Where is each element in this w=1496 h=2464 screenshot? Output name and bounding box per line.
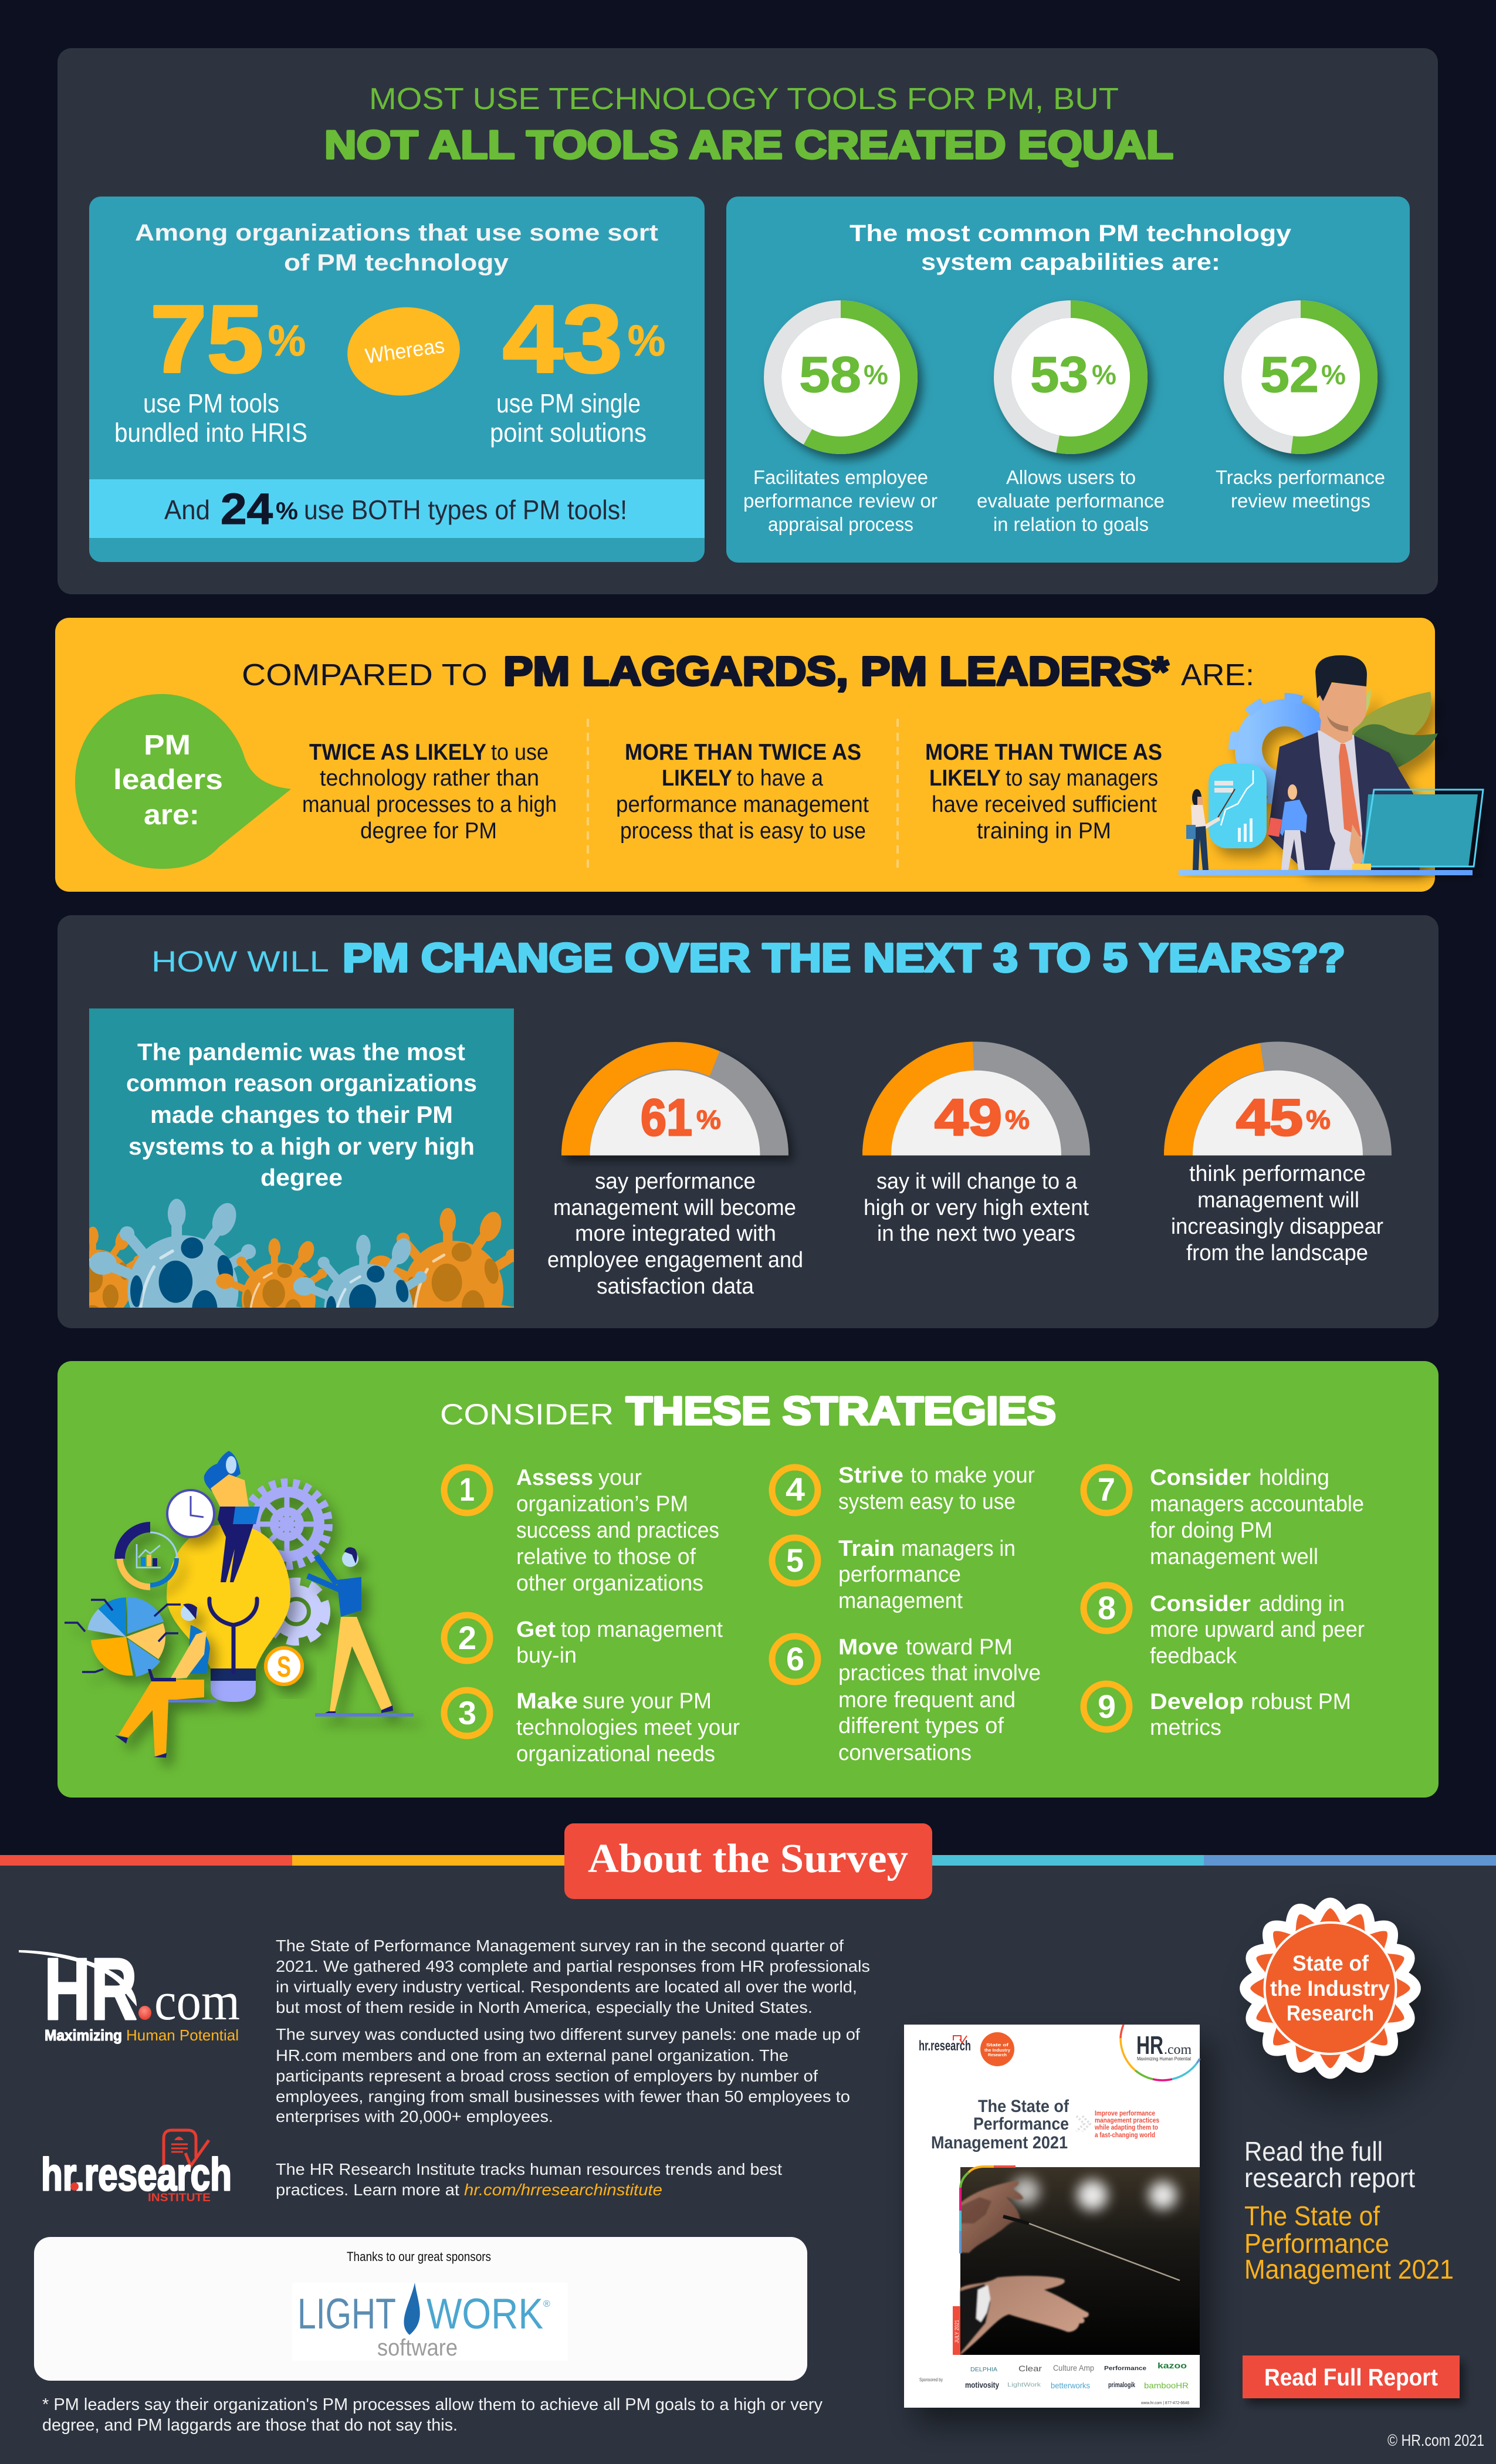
cover sponsors: kazoo — [1157, 2361, 1187, 2370]
cover subtitle: Improve performance — [1095, 2109, 1155, 2117]
cover title: Management 2021 — [931, 2133, 1068, 2152]
finding 3: MORE THAN TWICE AS — [925, 740, 1162, 765]
cover logos: .com — [1164, 2042, 1192, 2057]
card heading: system capabilities are: — [921, 249, 1220, 275]
label: gauge 3: management will — [1197, 1188, 1359, 1213]
cover logos: State of — [986, 2042, 1009, 2047]
label: capability 3: Tracks performance — [1216, 466, 1385, 488]
label: capability 3 — [1216, 466, 1385, 512]
icon: chart board — [1209, 764, 1267, 848]
card heading: of PM technology — [284, 250, 509, 276]
finding 2: MORE THAN TWICE AS — [625, 740, 861, 765]
cover photo: conductor hands: JULY 2021 — [954, 2320, 960, 2343]
finding 1: degree for PM — [360, 818, 497, 844]
heading: PM change: PM CHANGE OVER THE NEXT 3 TO 5 YEARS?? — [343, 935, 1345, 980]
donut: 52 percent: 52 — [1260, 347, 1319, 403]
button: read full report — [1243, 2355, 1460, 2398]
icon: laptop — [1352, 790, 1483, 870]
figure: woman with pointer — [1186, 789, 1235, 870]
callout: pandemic with virus illustration — [89, 1008, 514, 1308]
text: institute description: practices. Learn more at — [276, 2181, 459, 2199]
cover sponsors: primalogik — [1108, 2381, 1135, 2389]
logo: HR.com: com — [154, 1971, 240, 2031]
icon: coin — [266, 1648, 302, 1684]
stat: 75 percent: bundled into HRIS — [114, 418, 307, 448]
strategy 1: success and practices — [516, 1518, 719, 1543]
strategy 3: Make — [516, 1689, 578, 1714]
stat: 75 percent — [114, 285, 307, 448]
label: gauge 3: increasingly disappear — [1171, 1214, 1383, 1239]
strategy 3: 3 — [458, 1694, 476, 1731]
panel: about the survey — [0, 1823, 1496, 2464]
gauge: 45 percent: 45 — [1236, 1088, 1303, 1146]
stat: 43 percent: % — [628, 316, 665, 365]
cover subtitle — [1077, 2109, 1159, 2139]
badge: state of the industry research — [1245, 1903, 1416, 2073]
finding 1: TWICE AS LIKELY — [309, 740, 486, 765]
label: capability 2: evaluate performance — [977, 490, 1165, 512]
cover logos: hr.research — [919, 2038, 971, 2054]
logo: hr.research institute: hr.research — [41, 2148, 232, 2200]
text: survey description: employees, ranging from small businesses with fewer than 50 employees to — [276, 2087, 850, 2106]
icon: clock — [167, 1490, 214, 1537]
cover subtitle: management practices — [1095, 2116, 1159, 2124]
icon: platform — [1179, 870, 1473, 875]
cover sponsors: DELPHIA — [970, 2367, 997, 2373]
figure: man with folder — [1268, 784, 1307, 870]
panel: how PM will change — [38, 915, 1439, 1354]
icon: small gear — [267, 1582, 326, 1641]
strategy 1 — [444, 1465, 719, 1596]
gauge: 49 percent — [862, 1041, 1090, 1156]
label: gauge 1 — [547, 1169, 803, 1299]
gauge: 61 percent: % — [696, 1105, 721, 1135]
label: gauge 1: management will become — [553, 1196, 796, 1220]
finding 2 — [616, 740, 869, 844]
strategy 3: sure your PM — [583, 1689, 712, 1714]
heading: technology tools: NOT ALL TOOLS ARE CREATED EQUAL — [324, 123, 1173, 167]
strategy 2: Get — [516, 1617, 556, 1642]
text: read the full report: The State of — [1244, 2201, 1380, 2231]
strategy 6: conversations — [838, 1741, 972, 1765]
icon: leaves — [1348, 688, 1438, 769]
icon: gear — [1233, 698, 1336, 801]
figure: woman on bulb — [204, 1451, 260, 1582]
donut: 58 percent: % — [864, 359, 888, 390]
illustration: business man with chart and laptop — [1179, 655, 1483, 875]
strategy 1: 1 — [459, 1471, 475, 1508]
text: pandemic: common reason organizations — [126, 1069, 477, 1096]
finding 2: LIKELY — [662, 766, 732, 791]
strategy 6: toward PM — [906, 1635, 1013, 1660]
cover logos: HR — [1136, 2031, 1163, 2060]
gauge: 45 percent: % — [1306, 1105, 1331, 1135]
finding 2: performance management — [616, 792, 869, 817]
heading: technology tools — [324, 82, 1173, 167]
stat: 43 percent: point solutions — [490, 418, 647, 448]
donut: 52 percent — [1233, 309, 1369, 445]
label: capability 1: appraisal process — [768, 513, 913, 535]
cover logos: Maximizing Human Potential — [1137, 2056, 1191, 2062]
text: survey description: but most of them reside in North America, especially the United States. — [276, 1998, 813, 2016]
heading: consider these strategies: THESE STRATEGIES — [626, 1389, 1056, 1433]
text: institute description: The HR Research Institute tracks human resources trends and best — [276, 2160, 782, 2178]
band: 24 percent use both: use BOTH types of PM tools! — [304, 495, 627, 525]
text: read the full report: Performance — [1244, 2228, 1389, 2259]
card: bundled versus single point tools — [89, 197, 705, 562]
label: gauge 1: more integrated with — [575, 1221, 776, 1246]
strategy 6: Move — [838, 1635, 898, 1660]
label: gauge 2: in the next two years — [877, 1221, 1075, 1246]
band: 24 percent use both: And — [164, 495, 210, 525]
logo: HR.com: Human Potential — [126, 2026, 239, 2044]
label: gauge 3: from the landscape — [1186, 1241, 1368, 1265]
logo: hr.research institute — [41, 2130, 232, 2204]
strategy 2: top management — [561, 1617, 723, 1642]
color stripe — [0, 1855, 1496, 1866]
icon: donut chart — [114, 1522, 177, 1587]
figure: standing man — [307, 1547, 414, 1717]
finding 3 — [925, 740, 1162, 844]
strategy 5: performance — [838, 1562, 961, 1587]
logo: LightWork software — [292, 2283, 568, 2361]
speech bubble: PM leaders are — [75, 694, 291, 869]
cover title: The State of — [978, 2097, 1069, 2116]
cover sponsors — [919, 2361, 1189, 2405]
strategy 1: other organizations — [516, 1571, 703, 1596]
text: survey description: participants represent a broad cross section of employers by number of — [276, 2067, 818, 2085]
card heading — [849, 221, 1292, 275]
icon: light bulb — [167, 1524, 290, 1702]
illustration: viruses — [38, 1199, 526, 1354]
strategy 1: relative to those of — [516, 1545, 696, 1569]
strategy 7: management well — [1150, 1545, 1318, 1569]
cover sponsors: bambooHR — [1144, 2381, 1189, 2390]
text: pandemic: systems to a high or very high — [128, 1133, 475, 1160]
heading: consider these strategies — [440, 1389, 1056, 1433]
cover sponsors: Sponsored by — [919, 2377, 943, 2382]
strategy 1: organization’s PM — [516, 1492, 688, 1517]
text: survey description: enterprises with 20,000+ employees. — [276, 2107, 553, 2125]
strategy 9: Develop — [1150, 1690, 1244, 1714]
footnote: * PM leaders say their organization's PM processes allow them to achieve all PM goals to a high or very — [42, 2395, 823, 2414]
finding 1: technology rather than — [320, 766, 539, 791]
strategy 5: management — [838, 1589, 963, 1613]
logo: LightWork software: ® — [543, 2299, 550, 2309]
strategy 7: holding — [1259, 1465, 1329, 1490]
strategy 7 — [1084, 1465, 1364, 1569]
strategy 8: Consider — [1150, 1592, 1251, 1616]
speech bubble: PM leaders are: PM — [144, 730, 191, 761]
label: gauge 1: say performance — [595, 1169, 756, 1194]
text: survey description: 2021. We gathered 493 complete and partial responses from HR professionals — [276, 1957, 870, 1975]
cover subtitle: a fast-changing world — [1095, 2131, 1155, 2139]
cover subtitle: while adapting them to — [1094, 2123, 1158, 2131]
cover title — [931, 2097, 1069, 2152]
strategy 9: robust PM — [1251, 1690, 1351, 1714]
text: pandemic: made changes to their PM — [150, 1101, 453, 1128]
text: read the full report — [1244, 2136, 1454, 2284]
finding 1: manual processes to a high — [302, 792, 557, 817]
strategy 8 — [1084, 1585, 1365, 1668]
stat: 75 percent: use PM tools — [143, 388, 279, 418]
heading: compared to laggards — [242, 648, 1254, 694]
text: pandemic: The pandemic was the most — [137, 1038, 465, 1065]
strategy 2 — [444, 1615, 723, 1668]
finding 1 — [302, 740, 557, 844]
label: gauge 2 — [864, 1169, 1089, 1246]
illustration: light bulb with people and charts — [65, 1451, 414, 1758]
stat: 43 percent: 43 — [503, 285, 622, 392]
cover title: Performance — [973, 2114, 1069, 2134]
band: 24 percent use both: % — [276, 497, 298, 524]
cover logos — [919, 2025, 1200, 2080]
text: survey description: HR.com members and one from an external panel organization. The — [276, 2046, 788, 2064]
icon: coin: S — [277, 1650, 291, 1683]
strategy 2: 2 — [458, 1619, 476, 1656]
card: common capabilities — [726, 197, 1410, 563]
text: pandemic: degree — [260, 1164, 343, 1191]
panel: technology tools — [57, 48, 1438, 594]
strategy 9: 9 — [1098, 1688, 1116, 1725]
strategy 6: practices that involve — [838, 1661, 1041, 1685]
strategy 4: 4 — [786, 1471, 805, 1508]
strategy 4: Strive — [838, 1463, 903, 1488]
strategy 4: system easy to use — [838, 1490, 1016, 1514]
cover logos: Research — [988, 2052, 1007, 2057]
text: read the full report: Read the full — [1244, 2136, 1383, 2167]
strategy 3: organizational needs — [516, 1742, 715, 1766]
strategy 5: managers in — [901, 1536, 1016, 1561]
logo: hr.research institute: INSTITUTE — [148, 2192, 211, 2204]
finding 3: have received sufficient — [932, 792, 1157, 817]
label: gauge 1: employee engagement and — [547, 1248, 803, 1272]
label: gauge 1: satisfaction data — [597, 1274, 754, 1299]
heading: about the survey — [564, 1823, 932, 1899]
strategy 5: 5 — [786, 1542, 804, 1579]
heading: consider these strategies: CONSIDER — [440, 1398, 614, 1431]
figure: main business man — [1268, 655, 1420, 870]
gauge: 61 percent — [561, 1042, 788, 1156]
strategy 7: for doing PM — [1150, 1518, 1272, 1543]
text: survey description: in virtually every industry vertical. Respondents are located all over the world, — [276, 1978, 857, 1996]
donut: 53 percent — [1003, 309, 1139, 445]
label: capability 1: performance review or — [743, 490, 937, 512]
icon: pie chart — [65, 1597, 181, 1677]
strategy 8: more upward and peer — [1150, 1617, 1365, 1642]
speech bubble: PM leaders are: are: — [144, 800, 199, 831]
footnote: degree, and PM laggards are those that do not say this. — [42, 2416, 458, 2435]
text: institute description: hr.com/hrresearchinstitute — [464, 2181, 662, 2199]
text: survey description — [276, 1937, 870, 2125]
figure: sitting man — [115, 1603, 216, 1758]
gauge: 61 percent: 61 — [641, 1088, 692, 1146]
text: read the full report: research report — [1244, 2162, 1415, 2193]
label: gauge 2: say it will change to a — [876, 1169, 1078, 1194]
gauge: 49 percent: 49 — [935, 1088, 1002, 1146]
strategy 1: Assess — [516, 1465, 593, 1490]
heading: compared to laggards: ARE: — [1181, 658, 1254, 692]
strategy 4: to make your — [911, 1463, 1035, 1488]
logo: HR.com: HR — [44, 1940, 137, 2038]
cover sponsors: Performance — [1104, 2365, 1147, 2372]
strategy 4 — [772, 1463, 1035, 1514]
strategy 9 — [1084, 1684, 1351, 1740]
cover sponsors: betterworks — [1051, 2381, 1090, 2390]
box: sponsors — [34, 2237, 807, 2381]
strategy 7: managers accountable — [1150, 1492, 1364, 1517]
cover sponsors: Clear — [1018, 2364, 1042, 2373]
button: read full report: Read Full Report — [1264, 2364, 1438, 2391]
finding 1: to use — [491, 740, 549, 765]
logo: LightWork software: software — [377, 2335, 458, 2361]
cover logos: the Industry — [984, 2047, 1011, 2053]
finding 3: LIKELY — [929, 766, 1001, 791]
report cover — [904, 2025, 1200, 2408]
donut: 52 percent: % — [1321, 359, 1346, 390]
card heading: The most common PM technology — [849, 221, 1292, 246]
heading: compared to laggards: PM LAGGARDS, PM LEADERS* — [503, 648, 1169, 694]
panel: PM leaders versus laggards — [55, 618, 1483, 892]
strategy 9: metrics — [1150, 1715, 1221, 1740]
finding 3: to say managers — [1006, 766, 1158, 791]
stat: 43 percent: use PM single — [496, 388, 641, 418]
strategy 6: 6 — [786, 1640, 804, 1677]
cover sponsors: LightWork — [1007, 2382, 1041, 2388]
strategy 7: Consider — [1150, 1465, 1251, 1490]
label: capability 3: review meetings — [1231, 490, 1370, 512]
heading: compared to laggards: COMPARED TO — [242, 658, 488, 692]
strategy 3 — [444, 1689, 740, 1766]
label: gauge 2: high or very high extent — [864, 1196, 1089, 1220]
panel: strategies — [57, 1361, 1439, 1798]
cover photo: conductor hands — [953, 2167, 1200, 2355]
strategy 2: buy-in — [516, 1643, 577, 1668]
donut: 58 percent — [773, 309, 909, 445]
card heading: Among organizations that use some sort — [135, 220, 658, 246]
cover sponsors: motivosity — [965, 2380, 999, 2389]
finding 3: training in PM — [977, 818, 1111, 844]
label: capability 2: in relation to goals — [993, 513, 1149, 535]
callout: whereas — [343, 302, 464, 401]
strategy 6: different types of — [838, 1714, 1004, 1738]
heading: technology tools: MOST USE TECHNOLOGY TOOLS FOR PM, BUT — [369, 82, 1119, 116]
strategy 8: 8 — [1098, 1589, 1116, 1626]
cover sponsors: www.hr.com | 877-472-6648 — [1140, 2401, 1189, 2405]
finding 2: to have a — [737, 766, 823, 791]
cover sponsors: Culture Amp — [1053, 2363, 1094, 2372]
label: capability 1 — [743, 466, 937, 535]
strategy 6 — [772, 1635, 1041, 1765]
strategy 7: 7 — [1098, 1471, 1115, 1508]
strategy 8: adding in — [1259, 1592, 1345, 1616]
strategy 6: more frequent and — [838, 1688, 1016, 1712]
stat: 75 percent: 75 — [150, 285, 263, 392]
band: 24 percent use both — [89, 479, 705, 538]
badge: state of the industry research: the Industry — [1270, 1976, 1390, 2001]
donut: 53 percent: 53 — [1030, 347, 1088, 403]
heading: about the survey: About the Survey — [588, 1836, 908, 1881]
card heading — [135, 220, 658, 276]
band: 24 percent use both: 24 — [221, 485, 273, 533]
label: gauge 3 — [1171, 1162, 1383, 1265]
text: read the full report: Management 2021 — [1244, 2254, 1454, 2284]
stat: 75 percent: % — [268, 316, 306, 365]
logo: LightWork software: LIGHT — [297, 2290, 396, 2338]
heading: PM change: HOW WILL — [151, 945, 329, 978]
label: capability 2 — [977, 466, 1165, 535]
logo: HR.com — [19, 1940, 240, 2044]
logo: HR.com: Maximizing — [45, 2026, 122, 2044]
icon: large gear — [246, 1483, 328, 1565]
label: capability 1: Facilitates employee — [753, 466, 928, 488]
gauge: 45 percent — [1164, 1041, 1392, 1156]
strategy 3: technologies meet your — [516, 1715, 740, 1740]
badge: state of the industry research: State of — [1292, 1951, 1369, 1975]
logo: LightWork software: WORK — [427, 2290, 543, 2338]
text: survey description: The survey was conducted using two different survey panels: one made up of — [276, 2025, 860, 2043]
text: pandemic — [126, 1038, 477, 1191]
badge: state of the industry research: Research — [1287, 2001, 1374, 2025]
finding 2: process that is easy to use — [620, 818, 866, 844]
strategy 8: feedback — [1150, 1644, 1237, 1668]
strategy 5: Train — [838, 1536, 895, 1561]
footnote — [42, 2395, 823, 2435]
stat: 43 percent — [490, 285, 665, 448]
speech bubble: PM leaders are: leaders — [113, 764, 223, 796]
label: capability 2: Allows users to — [1006, 466, 1136, 488]
text: survey description: The State of Performance Management survey ran in the second quarter of — [276, 1937, 844, 1955]
strategy 5 — [772, 1536, 1016, 1613]
box: sponsors: Thanks to our great sponsors — [347, 2249, 491, 2264]
text: institute description — [276, 2160, 782, 2199]
label: gauge 3: think performance — [1189, 1162, 1366, 1186]
callout: whereas: Whereas — [364, 333, 446, 368]
donut: 58 percent: 58 — [799, 347, 861, 403]
gauge: 49 percent: % — [1005, 1105, 1030, 1135]
donut: 53 percent: % — [1092, 359, 1116, 390]
strategy 1: your — [598, 1465, 642, 1490]
